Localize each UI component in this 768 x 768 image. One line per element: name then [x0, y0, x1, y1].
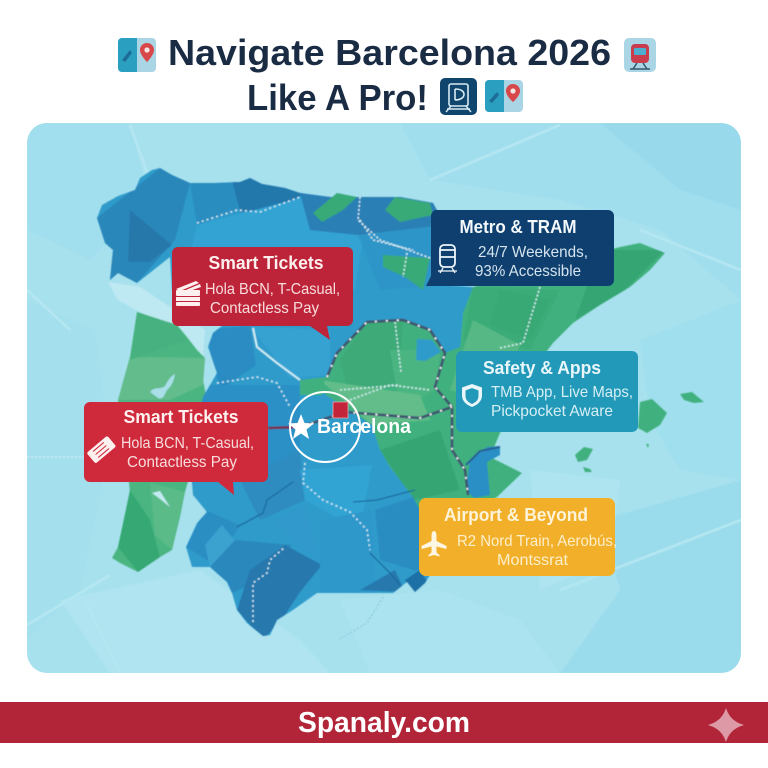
- heading: Smart Tickets: [208, 253, 324, 273]
- map of the peninsula: [97, 168, 704, 640]
- heading: Safety & Apps: [483, 358, 601, 378]
- body text: R2 Nord Train, Aerobús,: [457, 533, 617, 550]
- body text: Hola BCN, T-Casual,: [205, 281, 340, 298]
- body text: TMB App, Live Maps,: [491, 384, 633, 401]
- icon: plane: [422, 531, 446, 556]
- footer band: [0, 702, 768, 743]
- land: Spain blue regions: [97, 168, 480, 640]
- heading: Airport & Beyond: [444, 505, 588, 525]
- icon: sparkle: [708, 708, 744, 742]
- page title: [118, 32, 656, 118]
- land: Portugal green: [112, 312, 207, 572]
- callout: Smart Tickets upper: [172, 247, 353, 340]
- land: green regions east and centre: [300, 242, 666, 509]
- title icon: dark transit tile: [440, 78, 477, 115]
- marker circle: [290, 392, 360, 462]
- body text: 24/7 Weekends,: [478, 244, 588, 261]
- islands: [575, 392, 704, 472]
- body text: Pickpocket Aware: [491, 403, 613, 420]
- river and rail network lines: [197, 197, 540, 640]
- Barcelona marker: [288, 392, 412, 462]
- body text: 93% Accessible: [475, 263, 581, 280]
- footer text: Spanaly.com: [298, 707, 470, 739]
- callout: Smart Tickets lower: [84, 402, 268, 495]
- body text: Montssrat: [497, 552, 569, 569]
- callout: Safety and Apps: [456, 351, 638, 432]
- land: northern green patches: [313, 193, 433, 290]
- title line 2: Like A Pro!: [247, 77, 428, 118]
- title line 1: Navigate Barcelona 2026: [168, 32, 611, 73]
- icon: ticket: [87, 436, 116, 464]
- title icon: map pin right: [485, 80, 523, 112]
- star icon: [288, 414, 314, 439]
- icon: shield: [462, 384, 482, 407]
- heading: Smart Tickets: [124, 407, 238, 427]
- heading: Metro & TRAM: [460, 217, 576, 237]
- body text: Hola BCN, T-Casual,: [121, 435, 254, 452]
- panel: map background: [27, 123, 741, 673]
- city label: Barcelona: [317, 416, 412, 438]
- callout: Metro and TRAM: [426, 210, 614, 286]
- body text: Contactless Pay: [210, 300, 319, 317]
- callout: Airport and Beyond: [419, 498, 617, 576]
- red square marker: [333, 402, 348, 418]
- icon: tickets: [176, 281, 201, 306]
- icon: train: [438, 245, 457, 273]
- title icon: map pin left: [118, 38, 156, 72]
- body text: Contactless Pay: [127, 454, 237, 471]
- title icon: train: [624, 38, 656, 72]
